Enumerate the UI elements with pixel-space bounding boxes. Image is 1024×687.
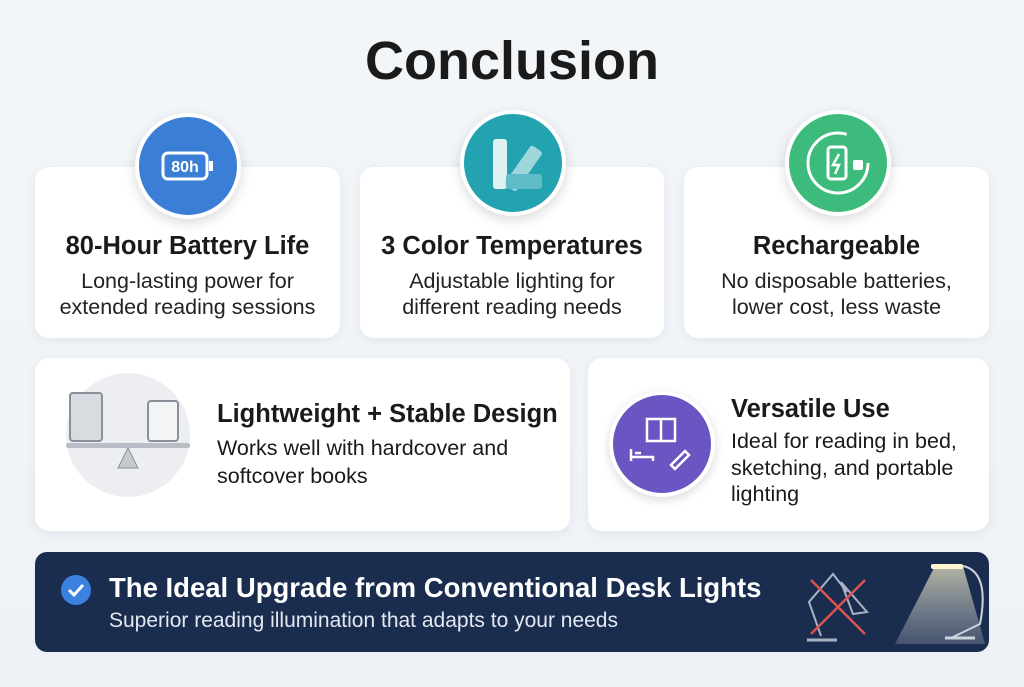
panel: battery: extended reading sessions [60, 295, 315, 319]
panel: battery: 80-Hour Battery Life [66, 232, 309, 260]
panel: color temperatures: Adjustable lighting for [409, 269, 615, 293]
panel: color temperatures: 3 Color Temperatures [381, 232, 643, 260]
panel: battery [35, 167, 340, 338]
panel: rechargeable: lower cost, less waste [732, 295, 941, 319]
panel: lightweight: softcover books [217, 464, 368, 488]
icon: versatile [609, 391, 715, 497]
banner: Superior reading illumination that adapts to your needs [109, 609, 618, 632]
icon: swatches [460, 110, 566, 216]
title: Conclusion [365, 31, 659, 91]
panel: rechargeable: Rechargeable [753, 232, 920, 260]
panel: versatile: Ideal for reading in bed, [731, 429, 957, 453]
banner: The Ideal Upgrade from Conventional Desk Lights [109, 572, 761, 603]
panel: rechargeable: No disposable batteries, [721, 269, 952, 293]
icon: battery 80h: 80h [171, 159, 199, 176]
panel: battery: Long-lasting power for [81, 269, 294, 293]
panel: rechargeable [684, 167, 989, 338]
icon: recharge [785, 110, 891, 216]
icon: battery 80h [135, 113, 241, 219]
icon: lamps [807, 564, 985, 644]
panel: color temperatures: different reading needs [402, 295, 622, 319]
panel: lightweight [35, 358, 570, 531]
icon: balance scale [66, 373, 190, 497]
icon: check [61, 575, 91, 605]
panel: lightweight: Works well with hardcover and [217, 436, 508, 460]
panel: color temperatures [360, 167, 664, 338]
panel: versatile: lighting [731, 482, 799, 506]
panel: versatile: Versatile Use [731, 395, 890, 423]
panel: versatile [588, 358, 989, 531]
banner [35, 552, 989, 652]
panel: versatile: sketching, and portable [731, 456, 953, 480]
panel: lightweight: Lightweight + Stable Design [217, 400, 558, 428]
